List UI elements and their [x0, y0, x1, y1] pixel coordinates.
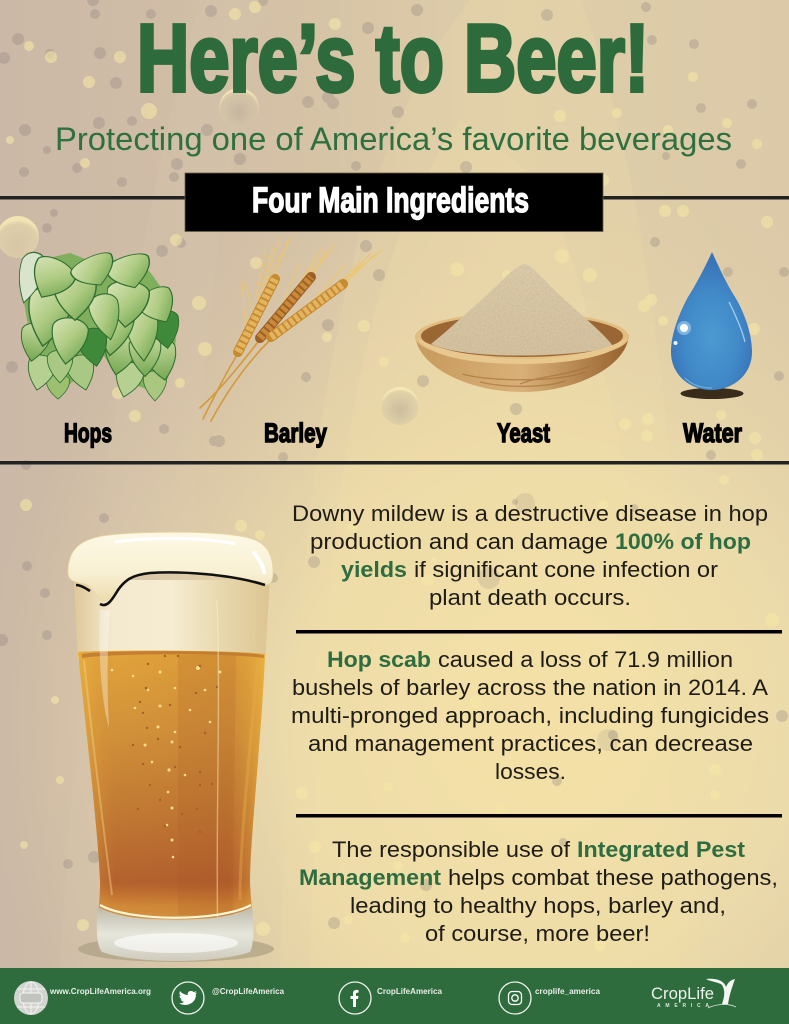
heading banner: Four Main Ingredients: Four Main Ingredients — [252, 181, 529, 220]
text block: integrated pest management: The responsible use of — [332, 837, 571, 862]
text block: integrated pest management: leading to healthy hops, barley and, — [350, 893, 726, 918]
icon: hops — [11, 248, 182, 401]
text block: hop scab: Hop scab — [327, 647, 431, 672]
heading banner: Four Main Ingredients — [185, 173, 603, 232]
facebook handle: CropLifeAmerica — [377, 986, 442, 996]
icon: yeast in bowl — [415, 264, 629, 392]
text block: hop scab — [291, 647, 769, 784]
text block: integrated pest management: helps combat these pathogens, — [448, 865, 778, 890]
text block: integrated pest management: of course, more beer! — [425, 921, 650, 946]
text block: integrated pest management — [299, 837, 778, 946]
text block: hop scab: multi-pronged approach, including fungicides — [291, 703, 769, 728]
glass highlights — [99, 610, 110, 728]
subtitle: Protecting one of America’s favorite beverages — [55, 121, 732, 157]
stems — [200, 340, 270, 421]
instagram handle: croplife_america — [535, 986, 600, 996]
glass upper — [74, 580, 270, 660]
icon: instagram — [499, 982, 531, 1014]
text block: downy mildew: if significant cone infection or — [414, 557, 719, 582]
footer bar — [0, 968, 789, 1024]
label: Barley: Barley — [264, 418, 327, 448]
logo: CropLife America: CropLife — [651, 985, 714, 1003]
barley ears — [238, 279, 275, 352]
label: Water: Water — [683, 418, 742, 448]
illustration: glass of beer — [68, 532, 274, 962]
text block: downy mildew: yields — [341, 557, 407, 582]
icon: water drop — [671, 252, 752, 399]
text block: hop scab: bushels of barley across the nation in 2014. A — [292, 675, 768, 700]
text block: downy mildew: 100% of hop — [615, 529, 751, 554]
text block: downy mildew: production and can damage — [310, 529, 608, 554]
divider — [296, 814, 782, 818]
icon: website globe — [14, 981, 48, 1015]
text block: integrated pest management: Management — [299, 865, 442, 890]
text block: integrated pest management: Integrated Pest — [577, 837, 746, 862]
text block: downy mildew: Downy mildew is a destructive disease in hop — [292, 501, 768, 526]
twitter handle: @CropLifeAmerica — [212, 986, 284, 996]
right hop cone — [92, 250, 182, 401]
label: Yeast: Yeast — [497, 418, 550, 448]
logo: CropLife America — [651, 979, 736, 1009]
left hop cone — [11, 248, 125, 399]
awns — [242, 235, 382, 325]
bowl — [415, 335, 629, 392]
foam head — [68, 532, 273, 601]
section rules — [0, 196, 789, 464]
website text: www.CropLifeAmerica.org — [49, 986, 151, 996]
label: Hops: Hops — [64, 418, 112, 448]
glass base — [97, 907, 253, 961]
icon: facebook — [339, 982, 371, 1014]
bowl front rim — [417, 338, 627, 364]
icon: twitter — [172, 982, 204, 1014]
text block: hop scab: and management practices, can decrease — [308, 731, 753, 756]
yeast pile — [431, 264, 613, 356]
text block: downy mildew — [292, 501, 768, 610]
glass shadow — [78, 936, 274, 962]
text block: hop scab: caused a loss of 71.9 million — [438, 647, 733, 672]
divider — [296, 630, 782, 634]
text block: hop scab: losses. — [495, 759, 566, 784]
logo: CropLife America: AMERICA — [657, 1003, 709, 1009]
beer body — [78, 651, 265, 920]
text block: downy mildew: plant death occurs. — [429, 585, 631, 610]
icon: barley — [200, 235, 382, 421]
beer bubbles — [111, 666, 222, 858]
